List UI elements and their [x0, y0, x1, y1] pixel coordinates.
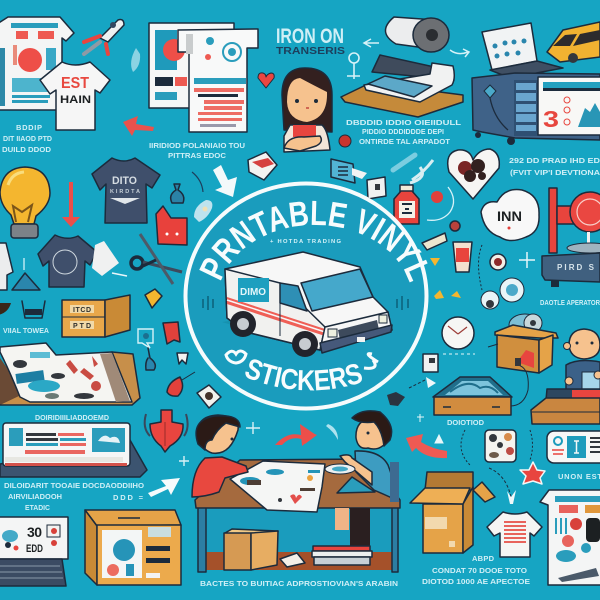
caption: bottom right: ABPD	[472, 554, 495, 563]
table floor and legs	[198, 505, 398, 572]
dark t-shirt DITO	[92, 158, 160, 223]
card with bars	[547, 431, 600, 463]
caption: top left: DUILD DDOD	[2, 145, 52, 154]
icon: dark circle	[490, 254, 506, 270]
dark t-shirt DITO: KIRDTA	[110, 189, 140, 195]
caption: right top: (FVIT VIP'I DEVTIONA	[510, 168, 600, 177]
small t-shirt with red pattern	[487, 512, 542, 557]
icon: scissors	[131, 234, 182, 284]
laptop bottom left: EDD	[26, 543, 43, 555]
caption: washing: VIIAL TOWEA	[3, 326, 50, 335]
icon: small calculator card	[423, 354, 438, 372]
icon: drop pendant	[146, 348, 155, 370]
icon: cloud with INN	[481, 190, 539, 240]
icon: pen stroke	[393, 155, 415, 170]
arrow: red curved left	[406, 434, 447, 458]
arrow: small white	[112, 273, 127, 276]
icon: small white marks	[417, 414, 443, 443]
icon: red tag	[163, 322, 180, 344]
box under table	[224, 529, 278, 570]
caption: bottom right: DIOTOD 1000 AE APECTOE	[422, 577, 530, 586]
icon: pliers	[84, 20, 124, 54]
icon: blue card with paper	[331, 159, 367, 183]
icon: money bag	[171, 184, 184, 203]
icon: red package	[156, 206, 187, 245]
laptop bottom left: 30	[27, 524, 42, 540]
icon: tooth	[177, 353, 188, 364]
icon: ribbon	[410, 160, 433, 183]
caption: laptop description: AIRVILIADOOH	[8, 492, 62, 501]
caption: bottom right	[422, 554, 530, 586]
caption: press: ONTIRDE TAL ARPADOT	[359, 137, 450, 146]
plus signs	[179, 422, 260, 466]
icon: small red dot	[450, 221, 460, 231]
icon: small yellow shapes	[430, 258, 461, 299]
dark t-shirt with emblem	[38, 235, 119, 287]
icon: bowl edge	[0, 303, 11, 315]
arrow: red pointing down	[62, 182, 80, 227]
table top	[195, 459, 400, 508]
arrow: red pointing left	[123, 116, 154, 136]
icon: glue tube	[422, 233, 447, 250]
icon: red star	[520, 462, 545, 484]
icon: cloud with INN: INN	[497, 208, 522, 224]
title: iron on transfers	[276, 25, 345, 57]
icon: light bulb	[0, 167, 50, 238]
stack of books	[280, 546, 372, 567]
badge: printable vinyl stickers	[184, 182, 428, 410]
plus sign	[519, 252, 535, 268]
icon: envelope	[248, 152, 277, 180]
arrow: red right	[300, 424, 316, 446]
caption: press: PIDDIO DDDIDDDE DEPI	[362, 127, 444, 136]
badge heading arc: PRNTABLE VINYL	[199, 200, 428, 282]
caption: laptop description: DDD =	[113, 493, 144, 502]
caption: top left: BDDIP	[16, 123, 42, 132]
caption: press	[346, 118, 462, 146]
title: iron on transfers: IRON ON	[276, 25, 344, 48]
caption: laptop heading: DOIRIDIIILIADDOEMD	[35, 413, 110, 422]
poster: document sheet	[149, 23, 234, 108]
icon: curved arrow	[192, 172, 203, 192]
caption: top left: DIT IIAOD PTD	[3, 134, 53, 143]
heat press on wooden table	[341, 55, 463, 117]
caption: top left	[2, 123, 53, 154]
cardboard box with label	[85, 510, 181, 585]
icon: heart	[258, 73, 274, 88]
icon: key pin	[347, 53, 360, 79]
press machine red dial: PIRD S	[557, 263, 595, 272]
laptop bottom left	[0, 517, 68, 586]
poster bottom right	[540, 490, 600, 585]
icon: dashed curve	[478, 245, 482, 290]
picture frame pyramid press	[433, 377, 512, 415]
icon: wash basin	[22, 301, 45, 318]
arrows beside roll	[364, 39, 469, 57]
caption: centre top	[149, 141, 245, 160]
caption: laptop description: DILOIDARIT TOOAIE DOCDAODDIIHO	[4, 481, 144, 490]
caption: bottom right: CONDAT 70 DOOE TOTO	[432, 566, 527, 575]
icon: star bag	[145, 289, 162, 308]
icon: dashed arrow to tag	[409, 377, 436, 388]
icon: red stamp	[339, 135, 351, 147]
badge subtext: + HOTDA TRADING	[270, 239, 341, 245]
caption: press small: DOIOTIOD	[447, 418, 485, 427]
arrow: red curve centre	[275, 430, 317, 445]
sticker swatch tile	[485, 430, 516, 462]
printing machine with screen: 3	[543, 106, 559, 132]
open box with discs	[488, 314, 558, 406]
badge side marks	[203, 296, 408, 310]
cardboard drawers box	[62, 295, 130, 337]
laptop on machine	[482, 23, 563, 78]
icon: badge eye	[197, 385, 221, 408]
icon: small document	[367, 177, 386, 199]
arrow: white curved	[326, 424, 338, 440]
icon: red bottle	[394, 185, 419, 224]
caption: centre top: PITTRAS EDOC	[168, 151, 227, 160]
dashed oval marks	[461, 430, 532, 465]
icon: heart with flower	[448, 149, 499, 199]
discs beside circle	[481, 278, 524, 309]
press machine red dial	[542, 188, 600, 287]
cardboard drawers box: ITCD	[73, 307, 91, 314]
delivery van: DIMO	[240, 287, 266, 298]
icon: chat bubble	[138, 329, 153, 348]
laptop with table	[0, 423, 147, 477]
white t-shirt EST HAIN	[40, 62, 110, 130]
poster: shirt shaped sheet	[178, 29, 258, 132]
dark t-shirt DITO: DITO	[112, 175, 137, 187]
white t-shirt EST HAIN: HAIN	[60, 94, 91, 106]
delivery van	[222, 252, 392, 357]
caption: right top: 292 DD PRAD IHD ED	[509, 156, 600, 165]
caption: right top	[509, 156, 600, 177]
open cardboard box	[410, 472, 495, 553]
baby with book on desk	[531, 329, 600, 424]
clock	[442, 317, 474, 349]
poster: t-shirt sheet top left	[0, 17, 74, 110]
icon: small bulb	[194, 200, 212, 222]
dashed arrow to t-shirt	[489, 468, 516, 504]
dashes below clock	[443, 353, 475, 355]
icon: paper roll	[385, 17, 449, 52]
caption: press: DBDDID IDDIO OIEIIDULL	[346, 118, 462, 127]
icon: black cap	[387, 392, 405, 406]
caption: centre top: IIRIDIOD POLANIAIO TOU	[149, 141, 245, 150]
caption: bottom: BACTES TO BUITIAC ADPROSTIOVIAN'S ARABIN	[200, 579, 398, 588]
sticker sheet on table	[230, 461, 325, 512]
badge ornaments	[226, 351, 378, 368]
cardboard drawers box: PTD	[73, 323, 91, 330]
icon: cloth tent	[12, 258, 40, 290]
caption: laptop description: ETADIC	[25, 503, 51, 512]
icon: red dot with curved arrow	[427, 187, 454, 220]
printing machine with screen	[472, 73, 600, 145]
icon: inner dot	[494, 258, 502, 266]
white t-shirt EST HAIN: EST	[61, 75, 89, 92]
sticker sheet on wooden board	[0, 343, 140, 405]
arrow: white up-right	[148, 478, 180, 497]
caption: laptop description	[4, 481, 144, 512]
badge: bottom word: STICKERS	[245, 359, 362, 390]
icon: white shirt edge	[0, 243, 13, 290]
child right in blue	[325, 411, 399, 548]
icon: water drop	[131, 48, 140, 72]
child left in red	[192, 415, 248, 497]
icon: cup	[453, 242, 472, 272]
icon: red pin	[167, 372, 195, 396]
icon: red shield	[145, 410, 188, 452]
title: iron on transfers: TRANSERIS	[276, 46, 345, 57]
kids at table	[192, 411, 400, 572]
yellow van	[547, 22, 600, 63]
character: girl with crossed arms	[282, 68, 332, 152]
arrow: white pointing down	[213, 165, 237, 197]
